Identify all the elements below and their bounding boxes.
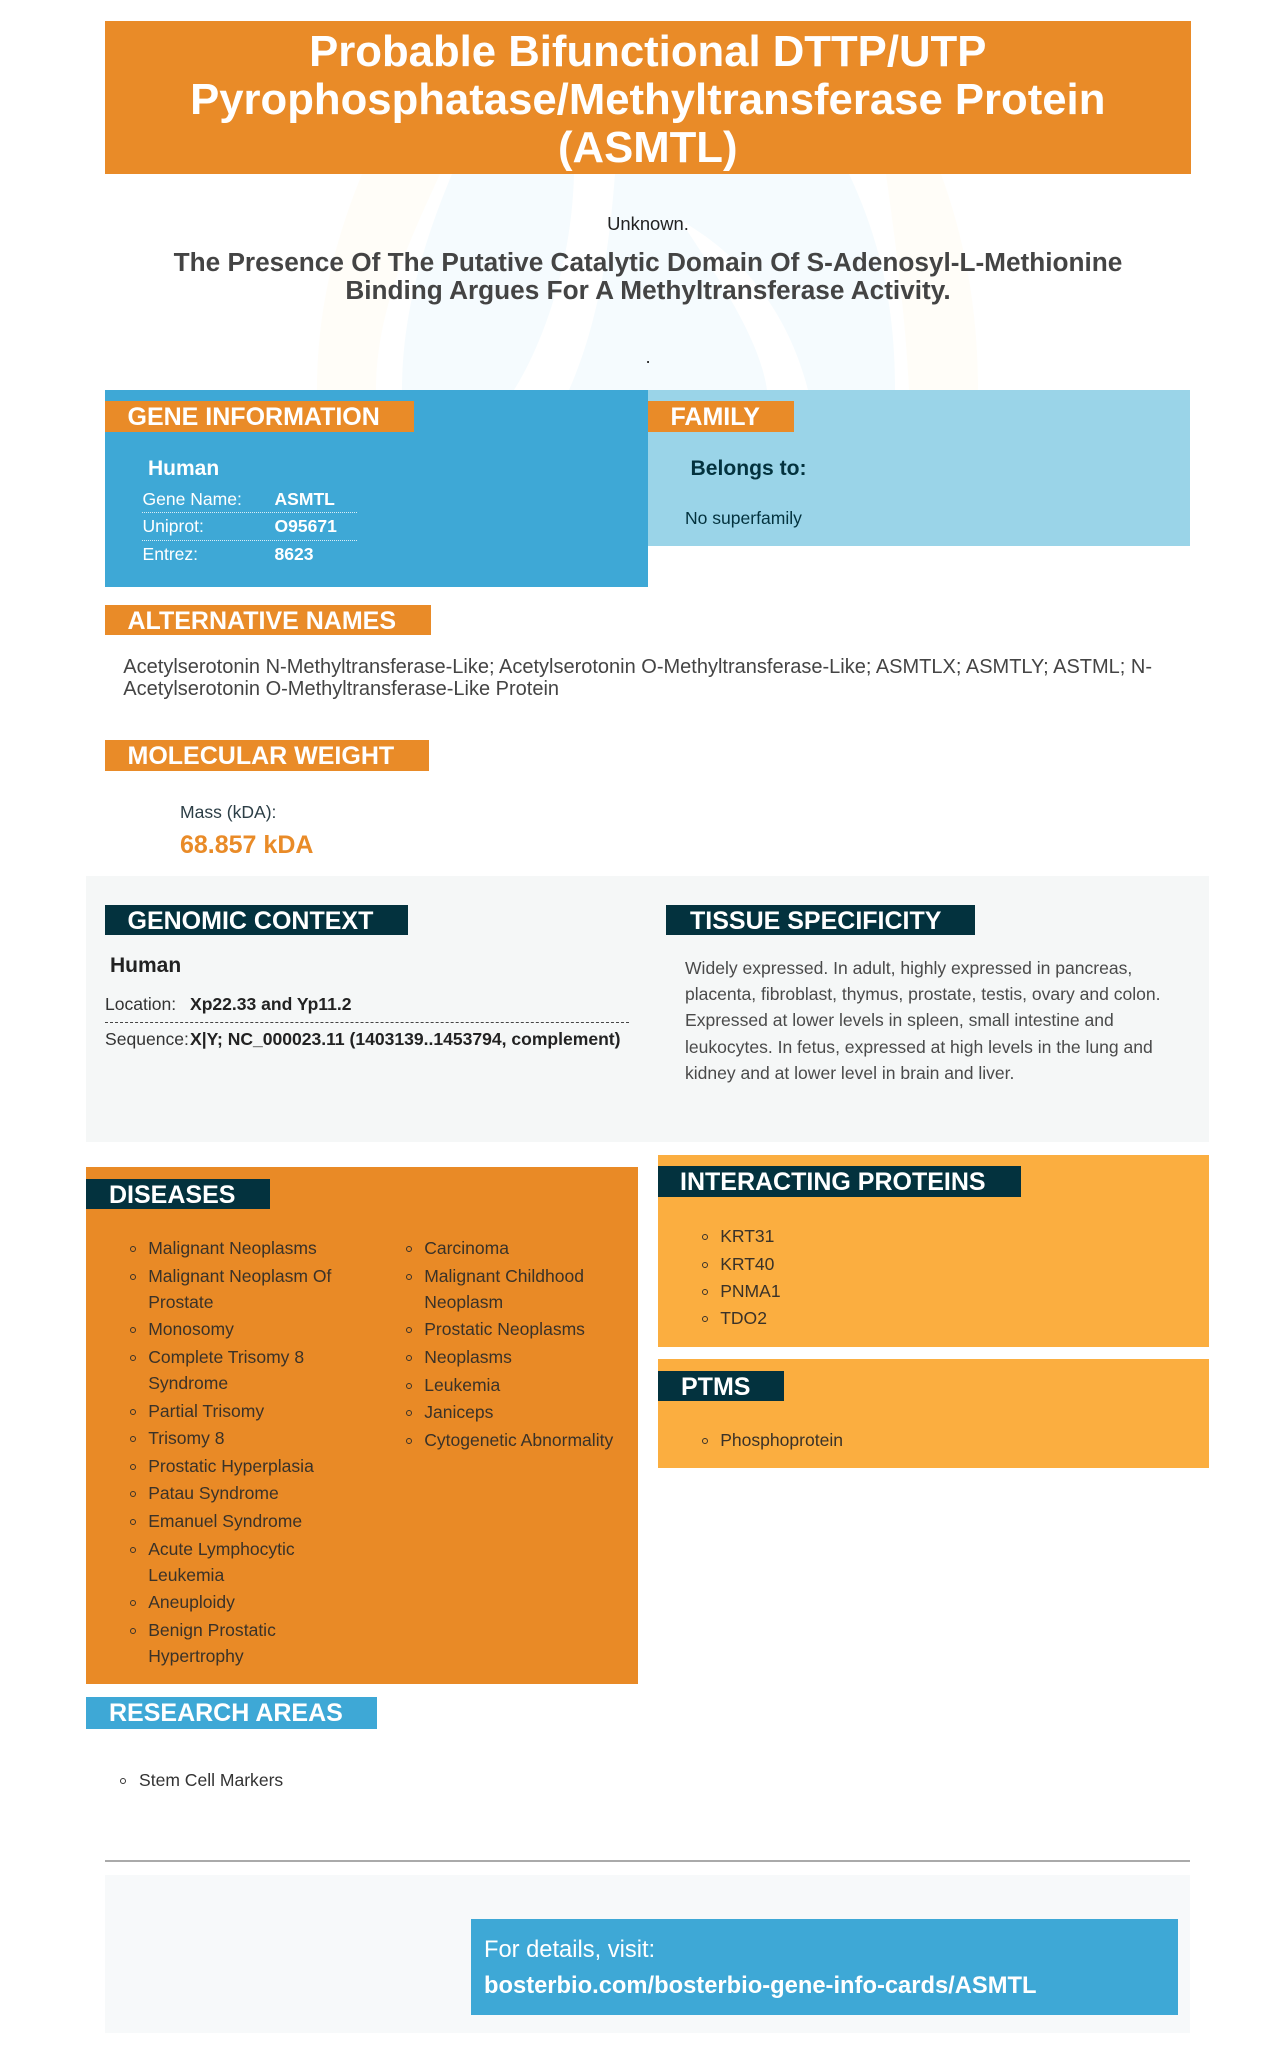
location row: Xp22.33 and Yp11.2 [190, 994, 351, 1014]
heading: genomic context: GENOMIC CONTEXT [128, 907, 373, 935]
mass value: 68.857 kDA [180, 831, 313, 859]
subtitle: The Presence Of The Putative Catalytic Domain Of S-Adenosyl-L-Methionine [174, 246, 1122, 276]
location row [105, 994, 351, 1014]
protein list: KRT40 [720, 1254, 774, 1274]
panel: family [648, 390, 1190, 546]
title banner: Probable Bifunctional DTTP/UTP [309, 27, 986, 76]
heading: interacting proteins: INTERACTING PROTEINS [680, 1168, 986, 1196]
panel: interacting proteins [658, 1155, 1209, 1346]
gene name row [142, 489, 335, 509]
heading: diseases [86, 1179, 270, 1209]
superfamily value: No superfamily [685, 508, 802, 528]
disease list column 1: Benign Prostatic [148, 1620, 276, 1640]
disease list column 2: Neoplasm [424, 1292, 503, 1312]
entrez row [142, 544, 314, 564]
tissue specificity text: Widely expressed. In adult, highly expressed in pancreas, [685, 958, 1132, 978]
disease list column 1: Emanuel Syndrome [148, 1511, 302, 1531]
heading: PTMs [658, 1371, 784, 1401]
uniprot row: O95671 [274, 516, 337, 536]
heading: PTMs: PTMS [681, 1373, 750, 1401]
tissue specificity text: Expressed at lower levels in spleen, small intestine and [685, 1010, 1114, 1030]
species label: Human [148, 457, 219, 480]
tissue specificity text: leukocytes. In fetus, expressed at high levels in the lung and [685, 1037, 1153, 1057]
entrez row: Entrez: [142, 544, 198, 564]
disease list column 1: Complete Trisomy 8 [148, 1347, 304, 1367]
species label: Human [110, 954, 181, 977]
disease list column 1: Aneuploidy [148, 1592, 235, 1612]
disease list column 1 [130, 1238, 332, 1666]
heading: gene information: GENE INFORMATION [128, 403, 380, 431]
panel: footer [105, 1875, 1190, 2033]
tissue specificity text: placenta, fibroblast, thymus, prostate, testis, ovary and colon. [685, 984, 1161, 1004]
location row: Location: [105, 994, 176, 1014]
background watermark [402, 174, 895, 390]
entrez row: 8623 [274, 544, 314, 564]
protein list: TDO2 [720, 1308, 767, 1328]
disease list column 1: Partial Trisomy [148, 1400, 264, 1420]
dot: . [645, 346, 651, 367]
protein list: KRT31 [720, 1226, 774, 1246]
protein list: PNMA1 [720, 1281, 781, 1301]
panel: genomic context and tissue specificity [86, 876, 1209, 1142]
tissue specificity text [685, 958, 1161, 1083]
disease list column 1: Prostate [148, 1292, 213, 1312]
panel: gene information [105, 390, 648, 587]
disease list column 2: Neoplasms [424, 1347, 512, 1367]
disease list column 2: Carcinoma [424, 1238, 509, 1258]
subtitle [174, 246, 1122, 304]
PTM list: Phosphoprotein [720, 1430, 843, 1450]
disease list column 2: Malignant Childhood [424, 1266, 584, 1286]
disease list column 1: Malignant Neoplasms [148, 1238, 317, 1258]
alternative names text: Acetylserotonin O-Methyltransferase-Like Protein [123, 678, 559, 700]
protein list [702, 1226, 781, 1328]
heading: research areas: RESEARCH AREAS [109, 1699, 343, 1727]
disease list column 1: Prostatic Hyperplasia [148, 1456, 314, 1476]
title banner [105, 21, 1190, 174]
heading: tissue specificity: TISSUE SPECIFICITY [690, 907, 941, 935]
research areas list: Stem Cell Markers [139, 1770, 283, 1790]
sequence row: X|Y; NC_000023.11 (1403139..1453794, complement) [190, 1029, 620, 1049]
subtitle: Binding Argues For A Methyltransferase Activity. [345, 274, 951, 304]
disease list column 1: Syndrome [148, 1373, 228, 1393]
heading: molecular weight: MOLECULAR WEIGHT [128, 742, 394, 770]
gene name row: ASMTL [274, 489, 335, 509]
uniprot row: Uniprot: [142, 516, 204, 536]
callout: details link [471, 1919, 1178, 2015]
disease list column 1: Leukemia [148, 1565, 224, 1585]
disease list column 2: Cytogenetic Abnormality [424, 1430, 613, 1450]
title banner: Pyrophosphatase/Methyltransferase Protein [190, 75, 1105, 124]
function summary text [174, 213, 1122, 367]
heading: diseases: DISEASES [109, 1181, 235, 1209]
disease list column 1: Hypertrophy [148, 1646, 244, 1666]
panel: PTMs [658, 1359, 1209, 1468]
disease list column 1: Acute Lymphocytic [148, 1539, 295, 1559]
disease list column 2 [406, 1238, 614, 1450]
belongs to label: Belongs to: [690, 457, 807, 480]
alternative names text: Acetylserotonin N-Methyltransferase-Like; Acetylserotonin O-Methyltransferase-Like; ASMTLX; ASMTLY; ASTML; N- [123, 656, 1152, 678]
uniprot row [142, 516, 337, 536]
heading: family: FAMILY [670, 403, 760, 431]
details label: For details, visit: [484, 1937, 655, 1963]
function note: Unknown. [607, 213, 689, 234]
details url: bosterbio.com/bosterbio-gene-info-cards/ASMTL [484, 1973, 1037, 1999]
disease list column 1: Trisomy 8 [148, 1428, 224, 1448]
panel: diseases [86, 1167, 638, 1684]
disease list column 1: Malignant Neoplasm Of [148, 1266, 331, 1286]
sequence row: Sequence: [105, 1029, 189, 1049]
heading: alternative names: ALTERNATIVE NAMES [128, 607, 396, 635]
alternative names text [123, 656, 1152, 700]
heading: family [648, 401, 794, 432]
disease list column 1: Monosomy [148, 1319, 234, 1339]
mass label: Mass (kDA): [180, 802, 276, 822]
disease list column 2: Prostatic Neoplasms [424, 1319, 585, 1339]
gene name row: Gene Name: [142, 489, 242, 509]
disease list column 1: Patau Syndrome [148, 1483, 279, 1503]
disease list column 2: Janiceps [424, 1402, 493, 1422]
title banner: (ASMTL) [558, 123, 738, 172]
tissue specificity text: kidney and at lower level in brain and liver. [685, 1063, 1014, 1083]
molecular weight value [180, 802, 313, 859]
disease list column 2: Leukemia [424, 1374, 500, 1394]
